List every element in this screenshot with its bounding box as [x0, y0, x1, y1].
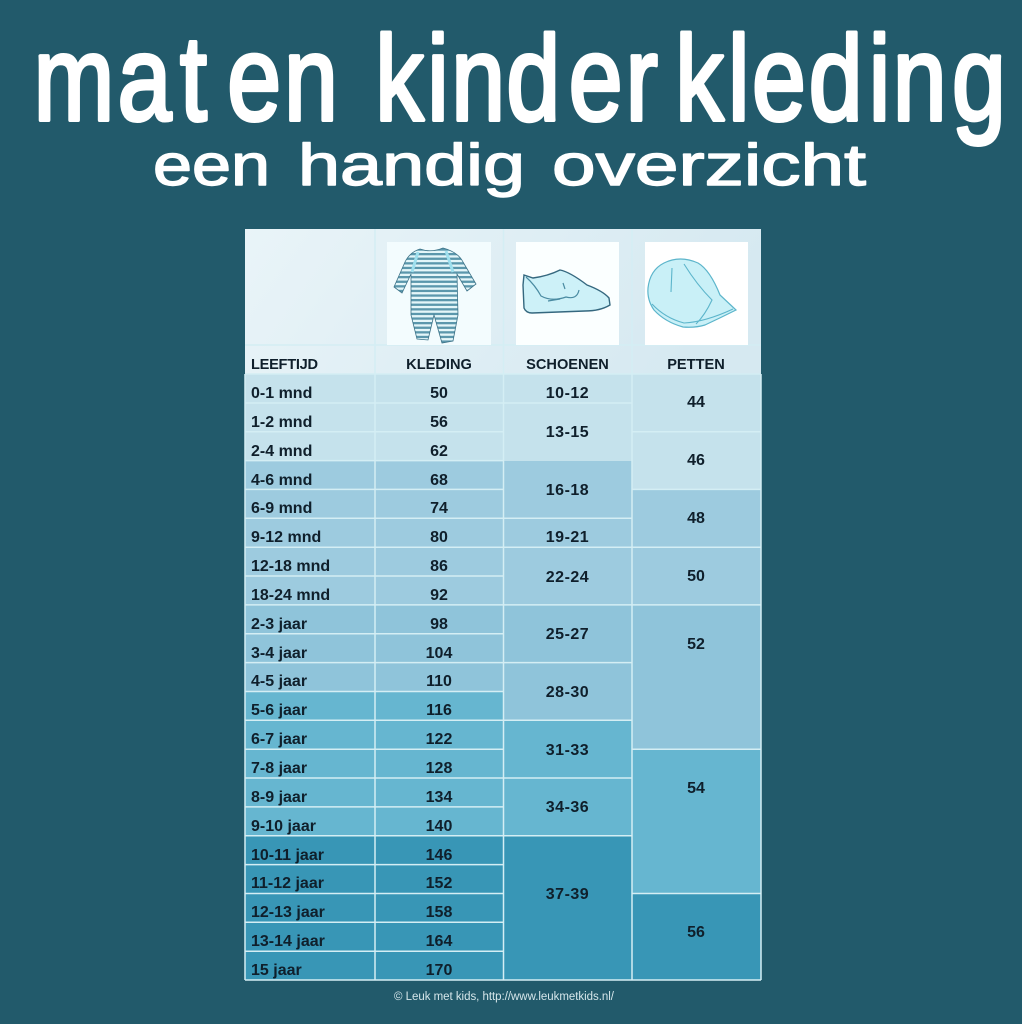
column: leeftijd: 13-14 jaar	[251, 933, 325, 950]
column: kleding: 56	[430, 414, 448, 431]
column: kleding: 170	[426, 962, 452, 979]
column: leeftijd: 10-11 jaar	[251, 847, 324, 864]
column: schoenen: 25-27	[546, 626, 589, 643]
column: leeftijd: 9-10 jaar	[251, 818, 316, 835]
subtitle: overzicht	[552, 133, 866, 198]
column: kleding	[426, 385, 452, 979]
column: kleding: 86	[430, 558, 448, 575]
column headings	[251, 357, 725, 373]
column: kleding: 98	[430, 616, 448, 633]
column: petten: 50	[687, 568, 705, 585]
column: schoenen: 31-33	[546, 742, 589, 759]
column: kleding: 80	[430, 529, 448, 546]
row backgrounds	[245, 374, 761, 980]
column: kleding: 128	[426, 760, 452, 777]
column: schoenen: 34-36	[546, 799, 589, 816]
column: leeftijd: 18-24 mnd	[251, 587, 330, 604]
column: leeftijd: 6-9 mnd	[251, 500, 312, 517]
column: petten	[687, 394, 705, 941]
title: kinderkleding	[375, 12, 1006, 147]
column: kleding: 74	[430, 500, 448, 517]
column: kleding: 104	[426, 645, 452, 662]
column: kleding: 152	[426, 875, 452, 892]
column headings: LEEFTIJD	[251, 357, 318, 373]
column: leeftijd: 11-12 jaar	[251, 875, 324, 892]
column: kleding: 68	[430, 472, 448, 489]
column: leeftijd: 5-6 jaar	[251, 702, 307, 719]
column: leeftijd: 12-18 mnd	[251, 558, 330, 575]
column: kleding: 122	[426, 731, 452, 748]
header panel	[245, 229, 761, 374]
column: leeftijd: 9-12 mnd	[251, 529, 321, 546]
column: leeftijd	[251, 385, 330, 979]
subtitle	[153, 133, 866, 198]
column: leeftijd: 12-13 jaar	[251, 904, 325, 921]
column: schoenen: 16-18	[546, 482, 589, 499]
column: kleding: 92	[430, 587, 448, 604]
column: kleding: 110	[426, 673, 452, 690]
column: petten: 48	[687, 510, 705, 527]
column: leeftijd: 2-4 mnd	[251, 443, 312, 460]
title: maten	[34, 12, 338, 147]
icon: romper	[387, 242, 491, 345]
column: petten: 44	[687, 394, 705, 411]
column: schoenen: 37-39	[546, 886, 589, 903]
column headings: PETTEN	[667, 357, 725, 373]
footer credit: © Leuk met kids, http://www.leukmetkids.nl/	[394, 991, 615, 1003]
column: leeftijd: 4-5 jaar	[251, 673, 307, 690]
column: kleding: 62	[430, 443, 448, 460]
column: petten: 56	[687, 924, 705, 941]
column: schoenen: 22-24	[546, 569, 589, 586]
column: kleding: 146	[426, 847, 452, 864]
column: petten: 52	[687, 636, 705, 653]
column: kleding: 158	[426, 904, 452, 921]
column: leeftijd: 1-2 mnd	[251, 414, 312, 431]
column headings: SCHOENEN	[526, 357, 609, 373]
column: leeftijd: 2-3 jaar	[251, 616, 307, 633]
column: kleding: 134	[426, 789, 452, 806]
column: schoenen: 13-15	[546, 424, 589, 441]
column: leeftijd: 4-6 mnd	[251, 472, 312, 489]
size table	[245, 229, 761, 980]
column: leeftijd: 3-4 jaar	[251, 645, 307, 662]
shoe size cells	[504, 374, 632, 980]
column: schoenen: 28-30	[546, 684, 589, 701]
column: leeftijd: 7-8 jaar	[251, 760, 307, 777]
subtitle: handig	[298, 133, 525, 198]
icon: shoe	[516, 242, 619, 345]
subtitle: een	[153, 133, 270, 198]
column: leeftijd: 15 jaar	[251, 962, 302, 979]
column: leeftijd: 8-9 jaar	[251, 789, 307, 806]
column headings: KLEDING	[406, 357, 472, 373]
column: kleding: 164	[426, 933, 452, 950]
column: petten: 46	[687, 452, 705, 469]
icon: cap	[645, 242, 748, 345]
column: leeftijd: 6-7 jaar	[251, 731, 307, 748]
column: kleding: 140	[426, 818, 452, 835]
column: schoenen	[546, 385, 589, 903]
column: kleding: 116	[426, 702, 452, 719]
column: kleding: 50	[430, 385, 448, 402]
column: leeftijd: 0-1 mnd	[251, 385, 312, 402]
column: petten: 54	[687, 780, 705, 797]
column: schoenen: 10-12	[546, 385, 589, 402]
cap size cells	[632, 374, 761, 980]
column: schoenen: 19-21	[546, 529, 589, 546]
title	[34, 12, 1006, 147]
